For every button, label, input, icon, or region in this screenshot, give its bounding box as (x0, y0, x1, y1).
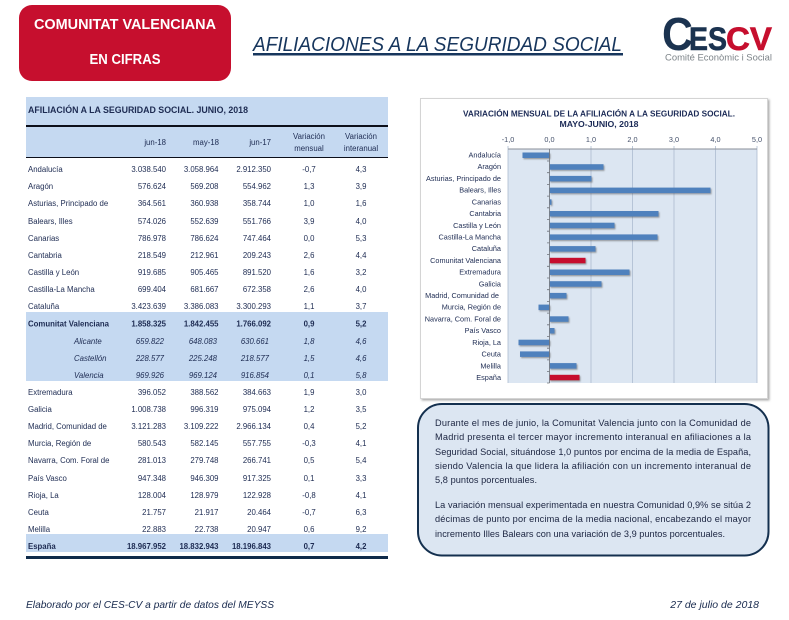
row: Navarra: 266.741 (243, 456, 271, 465)
row: España (28, 542, 367, 551)
row: Cataluña (28, 302, 366, 311)
row: Andalucía: 3.058.964 (184, 165, 219, 174)
row: Andalucía: -0,7 (302, 165, 316, 174)
row: Cataluña: 3,7 (356, 302, 366, 311)
row: Castilla y León: 1,6 (304, 268, 314, 277)
row: Andalucía (28, 165, 366, 174)
row: Ceuta (28, 508, 366, 517)
row: Rioja: 4,1 (356, 491, 366, 500)
row: Navarra: 279.748 (190, 456, 218, 465)
row: Asturias: 358.744 (243, 199, 272, 208)
row: Valencia: 969.926 (136, 371, 165, 380)
header badge: Comunitat Valenciana en cifras (19, 5, 231, 81)
row: Castilla y León: 3,2 (356, 268, 366, 277)
table column headers: Variación (293, 132, 325, 141)
row: Alicante (73, 337, 367, 346)
row: Comunitat Valenciana: 1.842.455 (184, 320, 219, 328)
row: Rioja: 122.928 (243, 491, 271, 500)
row: Castilla y León (28, 268, 366, 277)
row: Extremadura: 396.052 (138, 388, 166, 397)
row: España: 18.967.952 (127, 542, 167, 551)
row: Asturias: 360.938 (190, 199, 218, 208)
row: Madrid: 2.966.134 (236, 422, 272, 431)
row: Castellón: 1,5 (304, 354, 315, 363)
row: Canarias: 786.978 (138, 234, 166, 243)
row: Cataluña: 3.300.293 (236, 302, 271, 311)
row: Castellón (74, 354, 367, 363)
row: Melilla: 9,2 (356, 525, 366, 534)
category labels: Cantabria (469, 209, 502, 218)
row: Galicia: 996.319 (190, 405, 218, 414)
row: Aragón: 1,3 (304, 182, 314, 191)
row: Asturias: 1,0 (304, 199, 315, 208)
callout: commentary text: Madrid presenta el tercer mayor incremento interanual en afiliaciones a la (435, 432, 752, 442)
row: Melilla: 20.947 (247, 525, 271, 534)
row: Valencia (74, 371, 367, 380)
row: Castellón: 4,6 (356, 354, 367, 363)
row: Galicia (28, 405, 367, 414)
row: Castilla-La Mancha: 2,6 (304, 285, 314, 294)
footer date: 27 de julio de 2018 (669, 599, 759, 611)
plot area (508, 149, 757, 383)
x axis labels: 3,0 (669, 135, 679, 144)
category labels: Extremadura (459, 268, 502, 276)
category labels: Comunitat Valenciana (430, 256, 502, 265)
row: Canarias (28, 234, 366, 243)
row: Asturias: 364.561 (138, 199, 166, 208)
row: Alicante: 630.661 (241, 337, 269, 346)
row: Madrid: 3.121.283 (131, 422, 166, 431)
row: Balears: Balears, Illes (28, 217, 73, 226)
row: Galicia: Galicia (28, 405, 52, 414)
zero axis with ticks (547, 149, 550, 383)
row: España: 18.196.843 (232, 542, 272, 551)
logo: CES-CV: CV (726, 21, 773, 57)
header badge: Comunitat Valenciana en cifras: COMUNITAT VALENCIANA (34, 17, 217, 33)
table column headers (26, 125, 388, 158)
row: Aragón: 554.962 (243, 182, 271, 191)
highlight band: España (26, 534, 388, 552)
row: Rioja: -0,8 (302, 491, 316, 500)
row: España: 0,7 (304, 542, 314, 551)
row: Canarias: 5,3 (356, 234, 366, 243)
row: Melilla: 0,6 (304, 525, 314, 534)
row: Cantabria: 4,4 (356, 251, 367, 260)
callout: commentary text: La variación mensual experimentada en nuestra Comunidad 0,9% se sitúa 2 (435, 500, 751, 510)
row: Canarias: 0,0 (304, 234, 315, 243)
panel: bar chart of monthly variation (420, 98, 768, 398)
row: Rioja: Rioja, La (28, 491, 59, 500)
x axis labels: 2,0 (627, 135, 638, 144)
row: Alicante: 659.822 (136, 337, 165, 346)
row: Extremadura: 1,9 (304, 388, 314, 397)
logo: CES-CV: C (662, 8, 693, 60)
row: Asturias: 1,6 (356, 199, 366, 208)
row: Cataluña: 3.423.639 (131, 302, 166, 311)
row: Murcia (28, 439, 366, 448)
row: Aragón: Aragón (28, 182, 53, 191)
row: Comunitat Valenciana (28, 320, 367, 328)
category labels: Murcia, Región de (442, 302, 501, 312)
row: Cataluña: Cataluña (28, 302, 60, 311)
row: Navarra: 5,4 (356, 456, 367, 465)
table column headers: Variación (345, 132, 377, 141)
callout: commentary text: Seguridad Social, situándose 1,0 puntos por encima de la media de España, (435, 447, 751, 457)
row: Valencia: Valencia (74, 371, 104, 380)
row: Extremadura: Extremadura (28, 388, 73, 397)
row: Cantabria: Cantabria (28, 251, 62, 260)
callout: commentary text: décimas de punto por encima de la media nacional, encabezando el mayor (435, 514, 751, 524)
row: Cantabria: 2,6 (304, 251, 314, 260)
row: Castilla y León: 891.520 (243, 268, 272, 277)
row: Balears: 3,9 (304, 217, 314, 226)
x axis labels (502, 135, 762, 144)
row: España: 4,2 (356, 542, 367, 551)
category labels: Madrid, Comunidad de (425, 291, 499, 300)
row: Ceuta: 21.757 (142, 508, 166, 517)
row: Melilla: 22.883 (142, 525, 166, 534)
logo: CES-CV: Comité Econòmic i Social (665, 52, 772, 64)
category labels: Galicia (479, 279, 502, 288)
row: Melilla: 22.738 (195, 525, 218, 534)
row: Cantabria (28, 251, 367, 260)
row: Andalucía: 3.038.540 (131, 165, 167, 174)
row: Galicia: 3,5 (356, 405, 367, 414)
table title band: AFILIACIÓN A LA SEGURIDAD SOCIAL. JUNIO, 2018 (28, 104, 248, 115)
row: Castellón: 225.248 (188, 354, 218, 363)
row: Balears: 552.639 (190, 217, 218, 226)
row: Melilla (28, 525, 366, 534)
row: España: España (28, 542, 56, 551)
row: Canarias: 747.464 (243, 234, 272, 243)
row: Castilla-La Mancha: 4,0 (356, 285, 367, 294)
row: Rioja: 128.004 (138, 491, 167, 500)
table column headers: jun-17 (248, 138, 271, 147)
highlight band: Comunitat Valenciana (26, 312, 388, 381)
row: Extremadura: 3,0 (356, 388, 367, 397)
row: Cataluña: 3.386.083 (184, 302, 218, 311)
row: Andalucía: Andalucía (28, 165, 63, 174)
row: Galicia: 1,2 (304, 405, 314, 414)
row: Asturias: Asturias, Principado de (28, 199, 108, 208)
table column headers: mensual (294, 144, 324, 153)
row: Ceuta: -0,7 (302, 508, 316, 517)
row: Castilla y León: 919.685 (138, 268, 167, 277)
row: Ceuta: Ceuta (28, 508, 49, 517)
row: País Vasco: 917.325 (243, 474, 272, 483)
row: Cataluña: 1,1 (304, 302, 314, 311)
row: País Vasco: País Vasco (28, 474, 68, 483)
row: Aragón: 3,9 (356, 182, 366, 191)
category labels (425, 150, 502, 382)
category labels: Cataluña (472, 244, 502, 253)
x axis labels: 1,0 (586, 135, 596, 144)
x axis labels: 5,0 (752, 135, 762, 144)
callout: commentary text: Durante el mes de junio, la Comunitat Valencia junto con la Comunidad de (435, 418, 751, 428)
row: Castilla-La Mancha: Castilla-La Mancha (28, 285, 95, 294)
row: Melilla: Melilla (28, 525, 51, 534)
row: Extremadura (28, 388, 367, 397)
row: Comunitat Valenciana: Comunitat Valenciana (28, 320, 110, 328)
row: Navarra: 0,5 (304, 456, 315, 465)
callout: commentary text (418, 404, 768, 556)
row: Murcia: -0,3 (302, 439, 316, 448)
row: Aragón: 569.208 (190, 182, 218, 191)
row: País Vasco: 947.348 (138, 474, 166, 483)
row: Comunitat Valenciana: 1.766.092 (236, 320, 272, 328)
row: Navarra: Navarra, Com. Foral de (28, 456, 109, 465)
category labels: Balears, Illes (459, 186, 501, 194)
row: Navarra (28, 456, 367, 465)
row: Galicia: 975.094 (243, 405, 272, 414)
logo: CES-CV (662, 8, 773, 64)
category labels: Castilla y León (453, 221, 501, 230)
row: Madrid: 0,4 (304, 422, 315, 431)
row: Galicia: 1.008.738 (131, 405, 166, 414)
row: Balears: 574.026 (138, 217, 166, 226)
callout: commentary text: 5,8 puntos porcentuales. (435, 475, 537, 485)
chart title (463, 110, 735, 129)
row: Aragón (28, 182, 366, 191)
row: Castilla-La Mancha: 681.667 (190, 285, 218, 294)
category labels: Melilla (480, 362, 502, 370)
category labels: Castilla-La Mancha (439, 232, 502, 242)
logo: CES-CV: ES (689, 21, 727, 57)
row: Castellón: 228.577 (135, 354, 165, 363)
row: Valencia: 0,1 (304, 371, 314, 380)
table column headers: interanual (344, 144, 378, 153)
callout: commentary text: siendo Valencia la que lidera la afiliación con un incremento interanual de (435, 461, 751, 471)
row: Andalucía: 4,3 (356, 165, 366, 174)
main title: AFILIACIONES A LA SEGURIDAD SOCIAL (251, 33, 622, 56)
table column headers: may-18 (193, 138, 219, 147)
row: Alicante: Alicante (73, 337, 102, 346)
row: Rioja (28, 491, 366, 500)
table title band (26, 97, 388, 125)
row: Castilla y León: Castilla y León (28, 268, 79, 277)
row: Canarias: 786.624 (190, 234, 219, 243)
category labels: España (476, 373, 502, 382)
row: Asturias (28, 199, 366, 208)
row: Castilla-La Mancha: 699.404 (138, 285, 167, 294)
category labels: Andalucía (469, 150, 502, 160)
row: Madrid: 5,2 (356, 422, 366, 431)
x axis labels: -1,0 (502, 135, 514, 144)
row: Ceuta: 6,3 (356, 508, 366, 517)
row: Andalucía: 2.912.350 (236, 165, 272, 174)
row: Murcia: 557.755 (243, 439, 272, 448)
bars (518, 152, 710, 380)
row: Madrid (28, 422, 366, 431)
row: Alicante: 4,6 (356, 337, 367, 346)
row: Comunitat Valenciana: 5,2 (356, 320, 367, 328)
row: Murcia: 580.543 (138, 439, 166, 448)
category labels: Navarra, Com. Foral de (425, 314, 501, 324)
category labels: Aragón (477, 162, 501, 171)
footer source note: Elaborado por el CES-CV a partir de datos del MEYSS (26, 599, 274, 611)
row: Castellón: Castellón (74, 354, 107, 363)
row: Cantabria: 209.243 (243, 251, 271, 260)
x axis labels: 0,0 (544, 135, 555, 144)
row: Navarra: 281.013 (138, 456, 166, 465)
row: Comunitat Valenciana: 0,9 (304, 320, 315, 328)
row: España: 18.832.943 (179, 542, 219, 551)
category labels: Canarias (472, 197, 501, 206)
category labels: País Vasco (465, 326, 501, 335)
chart title: VARIACIÓN MENSUAL DE LA AFILIACIÓN A LA SEGURIDAD SOCIAL. (463, 110, 735, 118)
row: Balears (28, 217, 367, 226)
row: Castilla-La Mancha: 672.358 (243, 285, 271, 294)
row: Cantabria: 218.549 (138, 251, 166, 260)
row: Ceuta: 21.917 (195, 508, 218, 517)
row: País Vasco: 3,3 (356, 474, 366, 483)
table bottom rule (26, 556, 388, 559)
header badge: Comunitat Valenciana en cifras: EN CIFRAS (90, 52, 161, 68)
row: Castellón: 218.577 (240, 354, 270, 363)
category labels: Ceuta (482, 350, 502, 358)
row: Murcia: 582.145 (190, 439, 219, 448)
row: Balears: 551.766 (243, 217, 271, 226)
row: Canarias: Canarias (28, 234, 59, 243)
row: Ceuta: 20.464 (247, 508, 272, 517)
row: Madrid: 3.109.222 (184, 422, 218, 431)
row: Murcia: 4,1 (356, 439, 366, 448)
row: Rioja: 128.979 (190, 491, 218, 500)
callout: commentary text: incremento Illes Balears con una variación de 3,9 puntos porcentuales. (435, 529, 725, 539)
row: Valencia: 5,8 (356, 371, 367, 380)
row: País Vasco: 0,1 (304, 474, 314, 483)
row: Extremadura: 384.663 (243, 388, 271, 397)
row: Castilla-La Mancha (28, 285, 367, 294)
x axis labels: 4,0 (710, 135, 721, 144)
row: Valencia: 916.854 (241, 371, 270, 380)
table: afiliación a la Seguridad Social (26, 97, 388, 559)
chart card (420, 98, 768, 398)
row: Alicante: 1,8 (304, 337, 315, 346)
row: Valencia: 969.124 (189, 371, 218, 380)
row: Cantabria: 212.961 (190, 251, 218, 260)
table column headers: jun-18 (143, 138, 166, 147)
category labels: Asturias, Principado de (426, 174, 501, 183)
category labels: Rioja, La (472, 338, 502, 347)
row: Comunitat Valenciana: 1.858.325 (131, 320, 167, 328)
row: Madrid: Madrid, Comunidad de (28, 422, 107, 431)
row: Murcia: Murcia, Región de (28, 439, 91, 448)
row: Castilla y León: 905.465 (190, 268, 219, 277)
row: Alicante: 648.083 (189, 337, 218, 346)
row: Extremadura: 388.562 (190, 388, 218, 397)
row: País Vasco: 946.309 (190, 474, 218, 483)
row: Aragón: 576.624 (138, 182, 167, 191)
row: Balears: 4,0 (356, 217, 367, 226)
chart title: MAYO-JUNIO, 2018 (560, 120, 639, 129)
row: País Vasco (28, 474, 366, 483)
